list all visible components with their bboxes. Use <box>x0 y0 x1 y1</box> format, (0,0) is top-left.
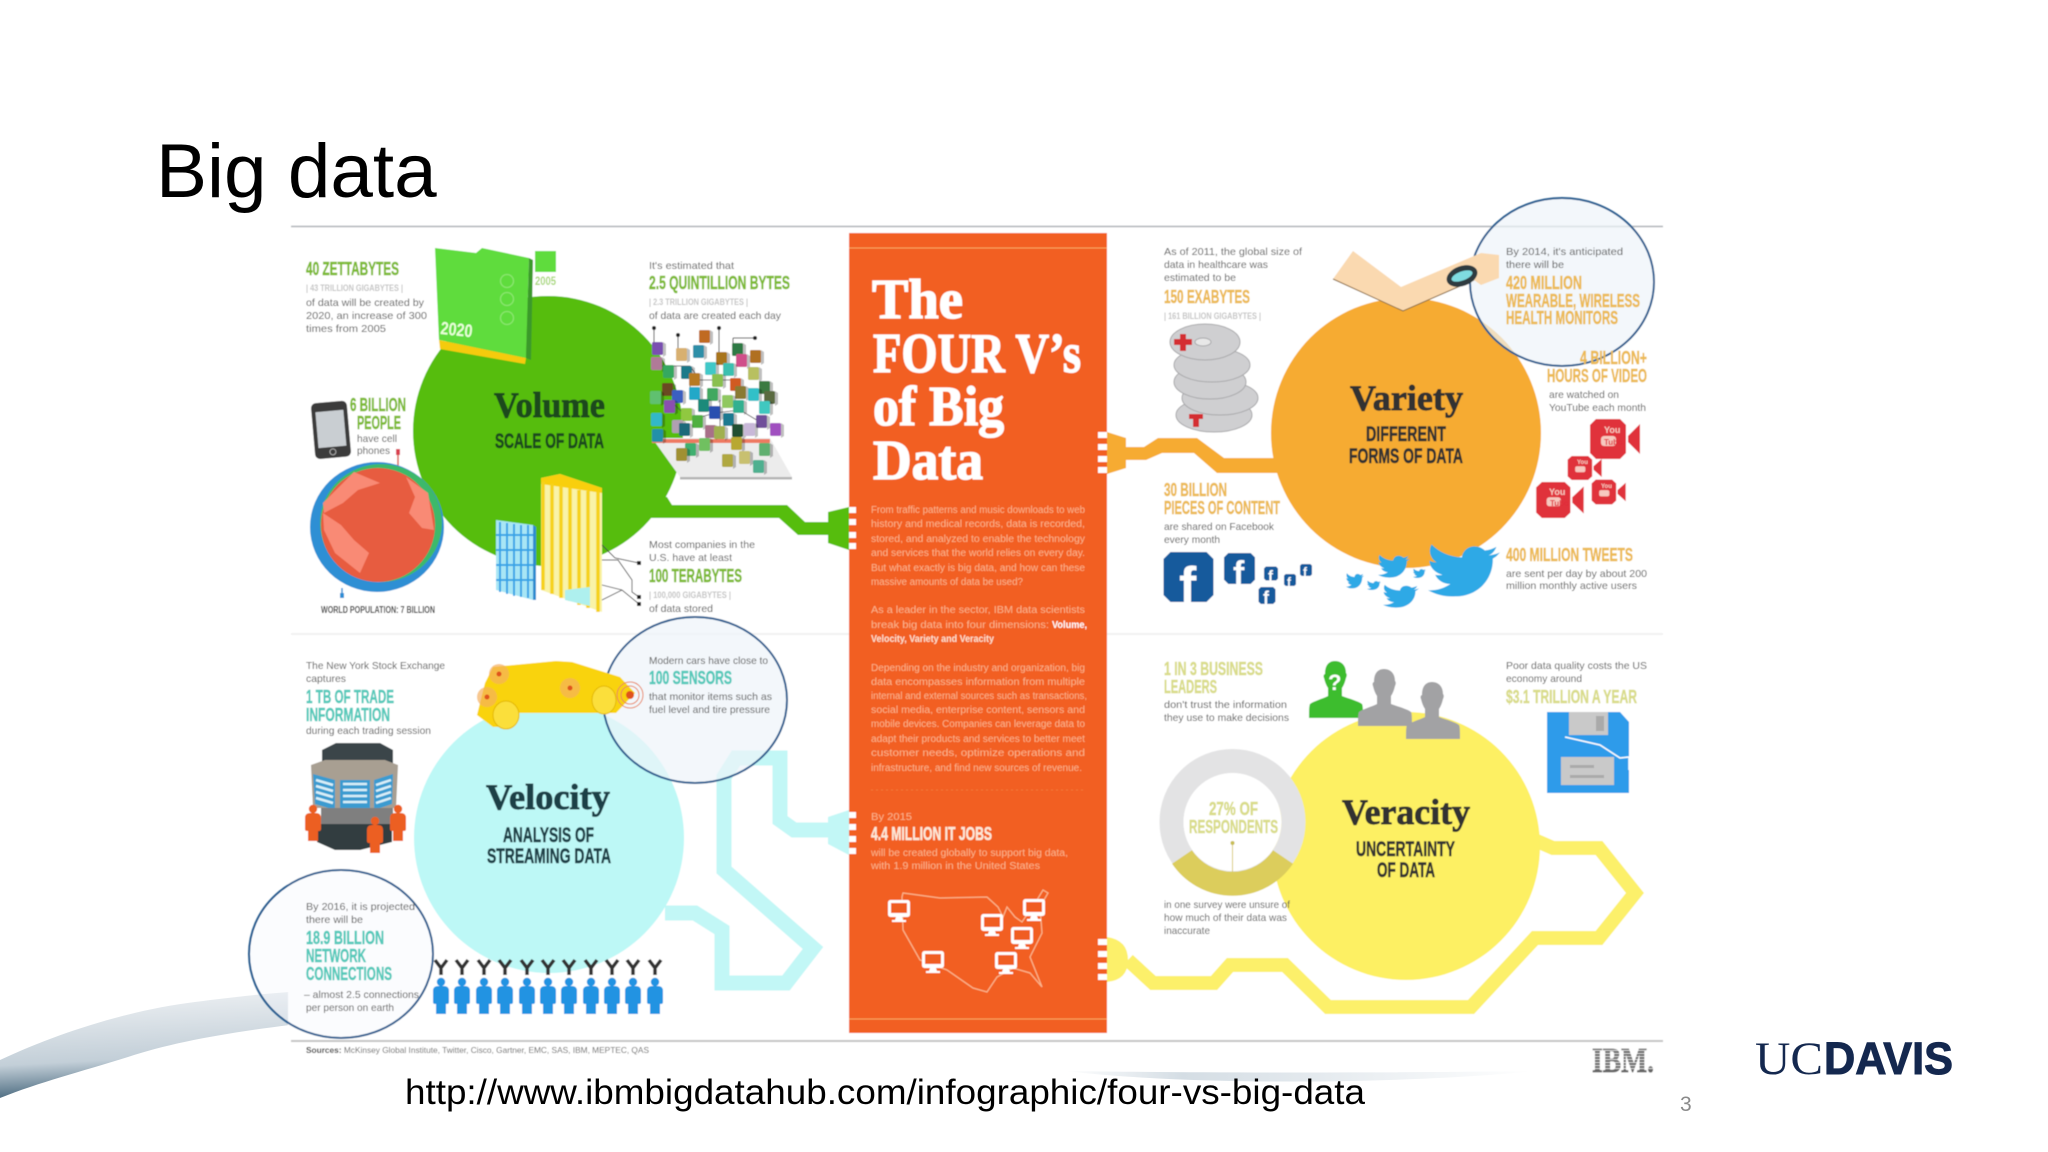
icon: buildings <box>496 474 641 612</box>
text: 420 million: HEALTH MONITORS <box>1506 308 1618 328</box>
text: 4.4 million IT jobs: will be created globally to support big data, <box>870 848 1068 859</box>
text: 4 billion+ hours of video: 4 BILLION+ <box>1580 348 1647 368</box>
label: world population: WORLD POPULATION: 7 BILLION <box>321 604 435 616</box>
text: leader paragraph: Volume, <box>1052 620 1087 631</box>
text: 150 exabytes: estimated to be <box>1164 272 1236 284</box>
subheading: uncertainty of data: OF DATA <box>1377 859 1435 882</box>
callout circle: network connections <box>249 870 433 1038</box>
text: leader paragraph: Velocity, Variety and Veracity <box>871 634 994 645</box>
text: 18.9 billion: By 2016, it is projected <box>306 901 415 913</box>
text: 150 exabytes: As of 2011, the global size of <box>1164 246 1302 258</box>
text: 400 million tweets: 400 MILLION TWEETS <box>1506 545 1633 565</box>
panel: center orange <box>849 233 1107 1033</box>
text: 40 zettabytes: times from 2005 <box>306 323 386 335</box>
text: 1 in 3 business leaders <box>1164 659 1289 724</box>
text: depending paragraph: internal and external sources such as transactions, <box>871 691 1087 702</box>
text: 400 million tweets: million monthly active users <box>1506 580 1637 592</box>
text: 30 billion pieces of content: 30 BILLION <box>1164 480 1227 500</box>
text: 1 TB of trade: The New York Stock Exchange <box>306 660 445 672</box>
donut chart: 27%: RESPONDENTS <box>1189 817 1278 837</box>
icon: car with sensors <box>477 661 643 729</box>
text: 100 sensors: Modern cars have close to <box>649 655 768 667</box>
subheading: uncertainty of data <box>1356 838 1455 882</box>
text: 18.9 billion: – almost 2.5 connections <box>304 989 419 1001</box>
text: leader paragraph: break big data into four dimensions: <box>871 620 1049 631</box>
text: 2.5 quintillion bytes: of data are created each day <box>649 310 782 322</box>
icons: youtube cameras: Tube <box>1550 499 1569 508</box>
text: 2.5 quintillion bytes <box>649 260 790 322</box>
icon: arm with wristband <box>1333 251 1499 311</box>
heading: Volume: Volume <box>494 385 605 425</box>
connector tabs <box>849 432 1107 980</box>
infographic <box>249 198 1668 1080</box>
text: 2.5 quintillion bytes: It's estimated that <box>649 260 734 272</box>
heading: The Four V's of Big Data: of Big <box>873 376 1004 438</box>
text: 100 sensors: fuel level and tire pressure <box>649 704 770 716</box>
page number: 3 <box>1680 1093 1692 1116</box>
text: $3.1 trillion <box>1506 660 1647 707</box>
text: depending paragraph: data encompasses information from multiple <box>871 677 1085 688</box>
text: 18.9 billion: NETWORK <box>306 946 366 966</box>
text: depending paragraph: social media, enterprise content, sensors and <box>871 705 1085 716</box>
text: survey: in one survey were unsure of <box>1164 899 1290 911</box>
icons: people busts: ? <box>1328 670 1341 695</box>
text: 6 billion people: phones <box>357 445 390 457</box>
velocity circle <box>414 703 684 973</box>
text: intro paragraph: and services that the world relies on every day. <box>871 548 1085 559</box>
text: 40 zettabytes: | 43 TRILLION GIGABYTES | <box>306 283 403 293</box>
text: 1 in 3 business leaders: they use to make decisions <box>1164 712 1289 724</box>
text: 100 sensors: that monitor items such as <box>649 691 772 703</box>
text: 420 million: By 2014, it's anticipated <box>1506 246 1623 258</box>
text: survey: inaccurate <box>1164 925 1210 937</box>
source url: http://www.ibmbigdatahub.com/infographic/four-vs-big-data <box>405 1073 1366 1112</box>
sources line: Sources: McKinsey Global Institute, Twitter, Cisco, Gartner, EMC, SAS, IBM, MEPTEC, QAS <box>306 1045 649 1055</box>
text: depending paragraph: mobile devices. Companies can leverage data to <box>871 719 1085 730</box>
text: 4.4 million IT jobs: with 1.9 million in the United States <box>870 861 1040 872</box>
text: 18.9 billion: there will be <box>306 914 363 926</box>
subheading: analysis of streaming data: ANALYSIS OF <box>503 824 594 847</box>
panel: velocity <box>305 660 684 1014</box>
heading: The Four V's of Big Data: The <box>872 269 963 331</box>
donut chart: 27%: 27% OF <box>1209 799 1258 819</box>
panel: volume <box>306 248 792 616</box>
callout circle: sensors <box>603 617 787 783</box>
text: 18.9 billion: CONNECTIONS <box>306 964 392 984</box>
text: $3.1 trillion: $3.1 TRILLION A YEAR <box>1506 687 1637 707</box>
heading: Velocity: Velocity <box>486 777 610 817</box>
text: leader paragraph <box>871 605 1087 645</box>
icons: twitter birds <box>1346 544 1500 608</box>
icons: facebook <box>1164 552 1312 615</box>
connector: velocity <box>665 758 849 983</box>
text: 18.9 billion: 18.9 BILLION <box>306 928 384 948</box>
text: 30 billion pieces of content: PIECES OF CONTENT <box>1164 498 1280 518</box>
icon: floppy disk <box>1547 712 1629 793</box>
text: 1 in 3 business leaders: don't trust the information <box>1164 699 1287 711</box>
connector: volume <box>650 495 849 550</box>
text: 100 terabytes: 100 TERABYTES <box>649 566 742 586</box>
text: 6 billion people <box>350 395 406 457</box>
text: 100 terabytes <box>649 539 755 615</box>
heading: Variety: Variety <box>1350 378 1463 418</box>
text: leader paragraph: As a leader in the sector, IBM data scientists <box>871 605 1085 616</box>
text: 2.5 quintillion bytes: | 2.3 TRILLION GIGABYTES | <box>649 297 748 307</box>
heading: Veracity: Veracity <box>1342 792 1470 832</box>
text: 1 TB of trade: 1 TB OF TRADE <box>306 687 394 707</box>
logo: UC Davis <box>1755 1033 1953 1085</box>
text: 30 billion pieces of content <box>1164 480 1280 546</box>
logo: UC Davis: DAVIS <box>1824 1033 1953 1084</box>
icons: facebook: f <box>1287 575 1292 589</box>
text: 4.4 million IT jobs: By 2015 <box>871 812 912 823</box>
text: 4.4 million IT jobs: 4.4 MILLION IT JOBS <box>871 824 992 844</box>
text: 400 million tweets <box>1506 545 1647 592</box>
text: 100 terabytes: U.S. have at least <box>649 552 732 564</box>
text: 4 billion+ hours of video: HOURS OF VIDEO <box>1547 366 1647 386</box>
icons: facebook: f <box>1233 555 1245 593</box>
veracity circle <box>1272 712 1540 980</box>
text: 150 exabytes: 150 EXABYTES <box>1164 287 1250 307</box>
text: 1 in 3 business leaders: LEADERS <box>1164 677 1217 697</box>
icons: youtube cameras: Tube <box>1604 438 1623 447</box>
heading: The Four V's of Big Data: FOUR V’s <box>873 323 1081 385</box>
text: $3.1 trillion: economy around <box>1506 673 1582 685</box>
subheading: different forms of data <box>1349 423 1463 468</box>
text: depending paragraph: adapt their products and services to better meet <box>871 734 1085 745</box>
text: 18.9 billion: per person on earth <box>306 1002 394 1014</box>
subheading: analysis of streaming data: STREAMING DATA <box>487 845 611 868</box>
heading: The Four V's of Big Data: Data <box>873 430 983 492</box>
text: intro paragraph: massive amounts of data be used? <box>871 577 1023 588</box>
text: 100 terabytes: of data stored <box>649 603 713 615</box>
text: 420 million: there will be <box>1506 259 1564 271</box>
text: 420 million: 420 MILLION <box>1506 273 1582 293</box>
text: 100 sensors <box>649 655 772 716</box>
subheading: uncertainty of data: UNCERTAINTY <box>1356 838 1455 861</box>
text: 1 TB of trade: during each trading session <box>306 725 431 737</box>
text: intro paragraph: stored, and analyzed to enable the technology <box>871 534 1085 545</box>
text: 400 million tweets: are sent per day by about 200 <box>1506 568 1647 580</box>
icon: people with antennas <box>433 960 663 1014</box>
text: 150 exabytes: data in healthcare was <box>1164 259 1268 271</box>
icons: youtube cameras: You <box>1577 460 1588 466</box>
text: intro paragraph: From traffic patterns and music downloads to web <box>871 505 1085 516</box>
donut chart: 27% <box>1172 761 1294 884</box>
text: depending paragraph: infrastructure, and find new sources of revenue. <box>871 763 1082 774</box>
icon: data cube grid <box>650 326 792 480</box>
text: 40 zettabytes: of data will be created by <box>306 297 425 309</box>
text: depending paragraph: Depending on the industry and organization, big <box>871 663 1085 674</box>
text: 4 billion+ hours of video: YouTube each month <box>1549 402 1646 414</box>
text: survey <box>1164 899 1290 937</box>
text: 100 sensors: 100 SENSORS <box>649 668 732 688</box>
text: depending paragraph: customer needs, optimize operations and <box>871 748 1085 759</box>
icon: memory cards: 2005 <box>535 274 556 288</box>
subheading: analysis of streaming data <box>487 824 611 868</box>
text: 6 billion people: PEOPLE <box>357 413 401 433</box>
text: survey: how much of their data was <box>1164 912 1287 924</box>
text: $3.1 trillion: Poor data quality costs the US <box>1506 660 1647 672</box>
text: 6 billion people: have cell <box>357 433 397 445</box>
text: 4.4 million IT jobs <box>870 812 1068 872</box>
icons: youtube cameras: You <box>1601 484 1612 490</box>
icons: facebook: f <box>1263 588 1270 608</box>
logo: IBM: IBM. <box>1592 1041 1654 1080</box>
variety circle <box>1271 298 1541 568</box>
text: 150 exabytes: | 161 BILLION GIGABYTES | <box>1164 311 1261 321</box>
volume circle <box>413 296 683 566</box>
logo: UC Davis: UC <box>1755 1033 1823 1085</box>
decorative swoosh bottom <box>1065 1071 1535 1082</box>
text: intro paragraph <box>871 505 1085 588</box>
text: 4 billion+ hours of video <box>1547 348 1647 414</box>
text: 1 in 3 business leaders: 1 IN 3 BUSINESS <box>1164 659 1263 679</box>
icons: youtube cameras: You <box>1549 487 1565 497</box>
connector: variety <box>1107 432 1285 474</box>
subheading: different forms of data: DIFFERENT <box>1366 423 1446 446</box>
text: intro paragraph: history and medical records, data is recorded, <box>871 519 1085 530</box>
icon: memory cards <box>435 248 556 364</box>
connector: veracity <box>1107 838 1635 1007</box>
text: 30 billion pieces of content: every month <box>1164 534 1220 546</box>
text: 40 zettabytes: 2020, an increase of 300 <box>306 310 427 322</box>
text: 4 billion+ hours of video: are watched on <box>1549 389 1619 401</box>
icons: youtube cameras: You <box>1604 425 1620 435</box>
text: 40 zettabytes <box>306 259 427 335</box>
text: 1 TB of trade <box>306 660 445 737</box>
icon: globe <box>310 449 444 598</box>
text: 100 terabytes: Most companies in the <box>649 539 755 551</box>
icon: phone <box>311 400 351 459</box>
text: 1 TB of trade: INFORMATION <box>306 705 390 725</box>
icons: facebook: f <box>1268 568 1274 585</box>
icon: memory cards: 2020 <box>440 318 473 341</box>
icons: youtube cameras <box>1536 419 1640 518</box>
decorative swoosh left <box>0 992 290 1098</box>
text: 100 terabytes: | 100,000 GIGABYTES | <box>649 590 731 600</box>
icon: discs <box>1170 324 1258 432</box>
text: intro paragraph: But what exactly is big data, and how can these <box>871 563 1085 574</box>
icons: facebook: f <box>1303 565 1308 579</box>
text: 40 zettabytes: 40 ZETTABYTES <box>306 259 399 279</box>
text: 18.9 billion <box>304 901 419 1014</box>
title: Big data <box>156 129 437 214</box>
text: 6 billion people: 6 BILLION <box>350 395 406 415</box>
panel: veracity <box>1164 659 1647 980</box>
text: 420 million <box>1506 246 1640 328</box>
text: 1 TB of trade: captures <box>306 673 346 685</box>
text: 2.5 quintillion bytes: 2.5 QUINTILLION BYTES <box>649 273 790 293</box>
subheading: scale of data: SCALE OF DATA <box>495 430 604 453</box>
text: 420 million: WEARABLE, WIRELESS <box>1506 291 1640 311</box>
icons: people busts <box>1309 661 1460 739</box>
map: US with monitors <box>888 890 1048 992</box>
text: depending paragraph <box>871 663 1087 774</box>
panel: variety <box>1164 246 1647 615</box>
heading: The Four V's of Big Data <box>872 269 1081 492</box>
text: 30 billion pieces of content: are shared on Facebook <box>1164 521 1275 533</box>
text: 150 exabytes <box>1164 246 1302 321</box>
icons: facebook: f <box>1179 557 1197 615</box>
icon: trading server <box>305 743 406 853</box>
subheading: different forms of data: FORMS OF DATA <box>1349 445 1463 468</box>
callout circle: wearable monitors <box>1470 198 1654 366</box>
